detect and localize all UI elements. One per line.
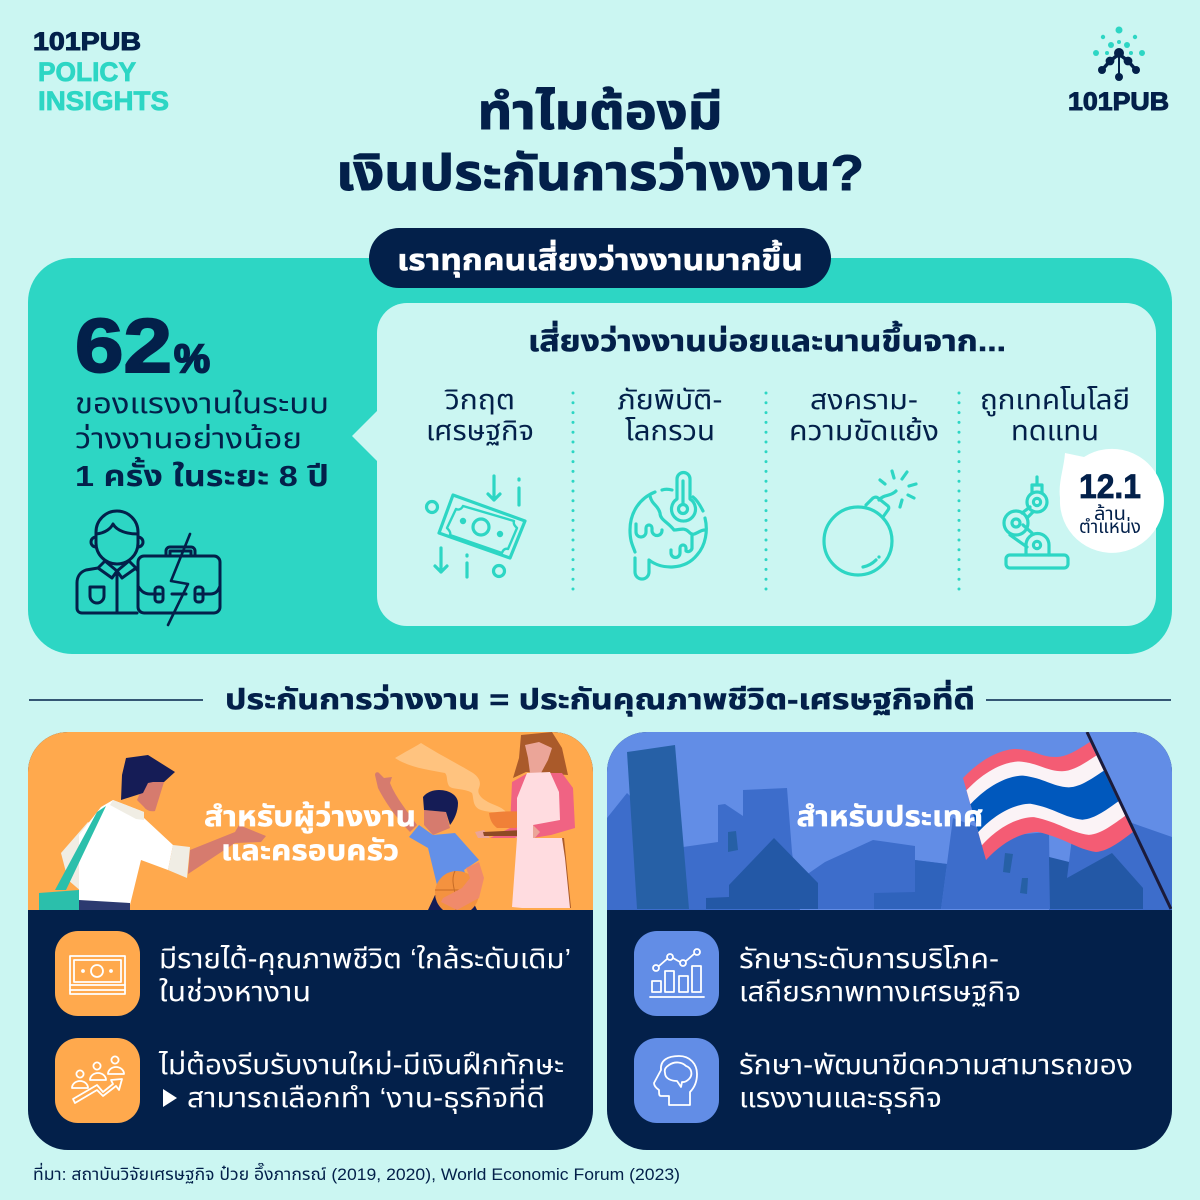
column labels: ทดแทน — [1011, 415, 1099, 446]
illustration: city skyline and Thai flag — [607, 732, 1172, 910]
logo: 101PUB network mark: 101PUB — [1068, 88, 1169, 116]
callout: 12.1 million jobs: ตำแหน่ง — [1079, 515, 1141, 538]
column labels: ภัยพิบัติ- — [618, 384, 722, 415]
card heading: สำหรับประเทศ — [796, 801, 984, 832]
mother — [513, 732, 568, 778]
icon: bomb — [824, 471, 916, 575]
logo: 101PUB Policy Insights — [33, 28, 169, 116]
inner panel with pointer — [352, 303, 1156, 626]
source note: ที่มา: สถาบันวิจัยเศรษฐกิจ ป๋วย อึ๊งภากรณ์ (2019, 2020), World Economic Forum (2023) — [33, 1162, 680, 1184]
statistic 62%: 62 — [75, 304, 172, 389]
section heading: ประกันการว่างงาน = ประกันคุณภาพชีวิต-เศรษฐกิจที่ดี — [225, 679, 975, 716]
callout: 12.1 million jobs: ล้าน — [1094, 502, 1126, 525]
title: ทำไมต้องมี — [478, 84, 722, 140]
column labels: ถูกเทคโนโลยี — [980, 384, 1130, 417]
text block: consumption — [739, 943, 1021, 1007]
text block: income — [159, 943, 571, 1007]
text block: capability: รักษา-พัฒนาขีดความสามารถของ — [739, 1049, 1133, 1080]
panel: for the unemployed and families — [28, 732, 593, 1150]
skyline — [607, 788, 800, 910]
title — [336, 84, 864, 201]
panel: for the country — [607, 732, 1172, 1150]
callout: 12.1 million jobs — [1060, 449, 1164, 553]
icon: melting globe with thermometer — [630, 473, 706, 579]
text block: skills and time: ไม่ต้องรีบรับงานใหม่-มีเงินฝึกทักษะ — [158, 1049, 564, 1080]
statistic description — [75, 388, 329, 493]
Thai flag — [963, 742, 1133, 860]
icon: head with brain — [634, 1038, 719, 1123]
statistic 62%: % — [174, 337, 210, 381]
heading pill — [369, 228, 831, 288]
card heading: และครอบครัว — [221, 835, 399, 866]
icon: stack of money — [55, 931, 140, 1016]
illustration: father, child and mother — [28, 732, 593, 915]
father — [61, 822, 89, 890]
column labels: วิกฤต — [444, 384, 515, 415]
column labels: ความขัดแย้ง — [789, 415, 939, 446]
steam — [395, 743, 506, 812]
title: เงินประกันการว่างงาน? — [336, 145, 864, 201]
child — [375, 772, 417, 832]
column labels — [426, 384, 1130, 446]
text block: skills and time: สามารถเลือกทำ ‘งาน-ธุรกิจที่ดี — [187, 1078, 545, 1114]
column labels: โลกรวน — [625, 415, 715, 446]
text block: capability: แรงงานและธุรกิจ — [739, 1082, 942, 1114]
callout: 12.1 million jobs: 12.1 — [1079, 468, 1141, 506]
text block: skills and time — [158, 1049, 564, 1114]
icon: falling money — [426, 476, 525, 577]
column labels: สงคราม- — [810, 384, 918, 415]
text block: capability — [739, 1049, 1133, 1114]
icon: chart — [634, 931, 719, 1016]
logo: 101PUB Policy Insights: 101PUB — [33, 28, 141, 56]
statistic description: ว่างงานอย่างน้อย — [75, 423, 302, 455]
icon: people and rising arrow — [55, 1038, 140, 1123]
icon: robot arm — [1004, 477, 1068, 568]
logo: 101PUB Policy Insights: POLICY — [38, 57, 136, 87]
sub-heading: risk causes: เสี่ยงว่างงานบ่อยและนานขึ้นจาก... — [528, 320, 1006, 358]
card heading — [204, 801, 416, 866]
icon: worker with broken briefcase — [77, 511, 220, 625]
card heading: สำหรับผู้ว่างงาน — [204, 801, 416, 834]
text block: income: ในช่วงหางาน — [159, 976, 311, 1007]
panel: risk of unemployment — [28, 228, 1172, 654]
text block: income: มีรายได้-คุณภาพชีวิต ‘ใกล้ระดับเดิม’ — [159, 943, 571, 975]
heading pill: เราทุกคนเสี่ยงว่างงานมากขึ้น — [397, 239, 803, 277]
statistic description: 1 ครั้ง ในระยะ 8 ปี — [75, 456, 329, 493]
logo: 101PUB network mark — [1068, 26, 1169, 116]
text block: consumption: รักษาระดับการบริโภค- — [739, 943, 999, 974]
logo: 101PUB Policy Insights: INSIGHTS — [38, 86, 169, 116]
statistic 62% — [75, 304, 210, 389]
column labels: เศรษฐกิจ — [426, 415, 534, 446]
text block: consumption: เสถียรภาพทางเศรษฐกิจ — [739, 976, 1021, 1007]
statistic description: ของแรงงานในระบบ — [75, 388, 329, 420]
